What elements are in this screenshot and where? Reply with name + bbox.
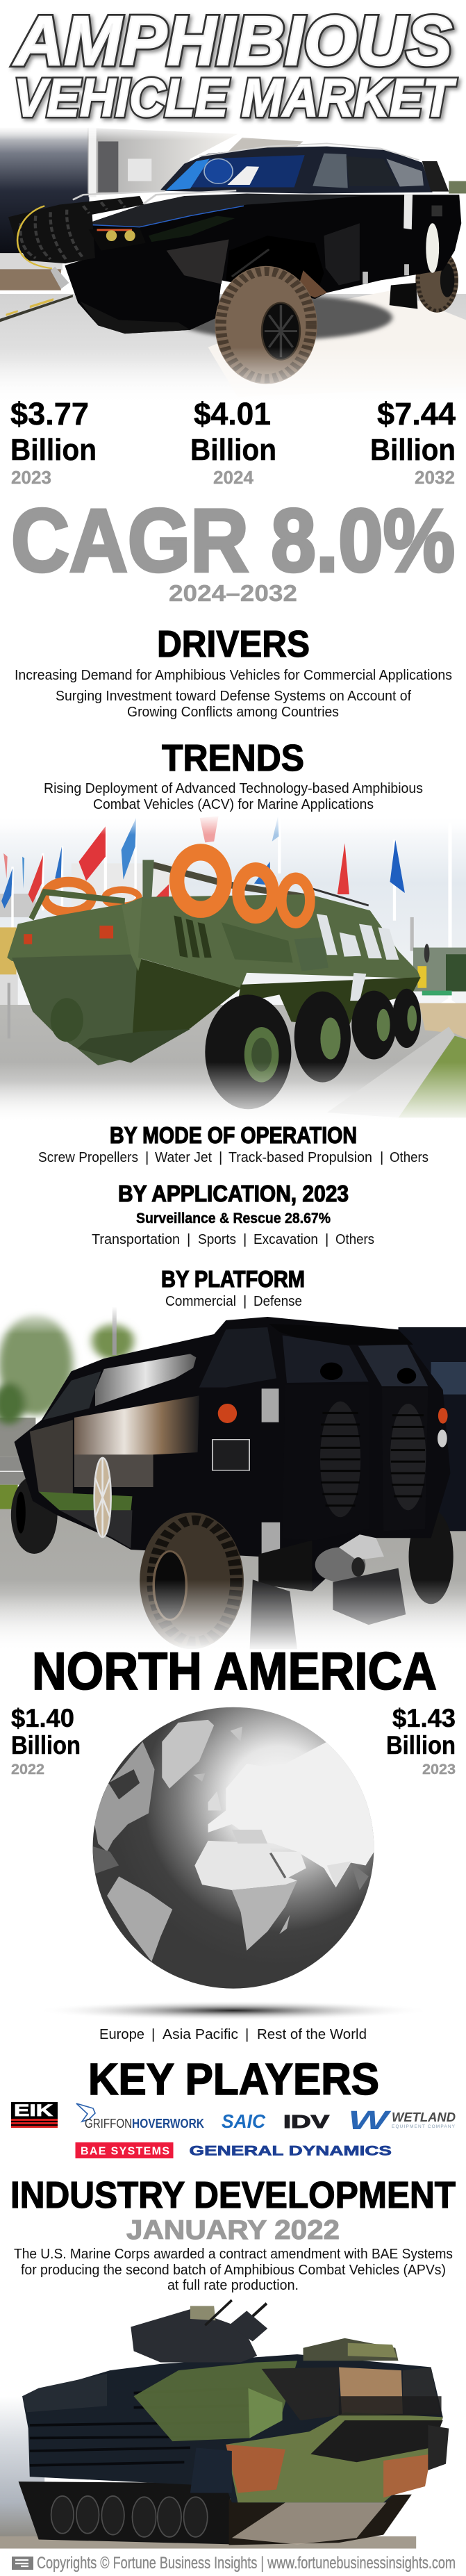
segments: platform: Commercial [165,1293,236,1309]
stat: 2032 market size: $7.44 [377,396,456,432]
logo: General Dynamics: GENERAL DYNAMICS [189,2143,392,2158]
segments: mode of operation: Screw Propellers [38,1149,138,1165]
title: AMPHIBIOUS [13,2,452,80]
segments: mode of operation: Others [390,1149,428,1165]
segments: application: | [325,1231,328,1247]
water jet nozzle [315,1534,384,1582]
body [15,1317,450,1591]
globe shadow [35,2001,431,2020]
segments: application: Transportation [92,1231,180,1247]
stat: north america 2022: 2022 [11,1762,44,1778]
segments: mode of operation: Water Jet [155,1149,212,1165]
spare tyre [8,190,236,268]
logo: Wetland Equipment Company: EQUIPMENT COMPANY [392,2124,456,2129]
segments: other regions [99,2026,367,2042]
stat: north america 2022 [11,1704,81,1778]
photo: green eight-wheeled armoured vehicle [0,814,466,1124]
tail lights and hinges [213,1388,448,1554]
segments: application: | [243,1231,247,1247]
logo: IDV: IDV [283,2111,330,2132]
front wheel [215,266,317,384]
segments: application [92,1231,374,1247]
stat: north america 2023: Billion [386,1731,456,1759]
heading: trends: TRENDS [162,737,304,779]
segments: other regions: | [151,2026,155,2042]
photo: black vehicle rear view [0,1306,466,1652]
logo: EIK [11,2101,58,2128]
logo: SAIC: SAIC [222,2110,266,2132]
heading: by platform: BY PLATFORM [161,1266,305,1292]
segments: application: Others [335,1231,374,1247]
stat: 2032 market size [370,396,456,488]
text: trends [44,780,423,812]
logo: Wetland Equipment Company: W [348,2106,392,2135]
text: trends: Rising Deployment of Advanced Technology-based Amphibious [44,780,423,796]
segments: platform: Defense [253,1293,302,1309]
title [13,2,457,128]
heading: north america: NORTH AMERICA [32,1642,437,1701]
title: AMPHIBIOUS [13,2,452,80]
logo: Griffon Hoverwork: GRIFFON [85,2117,132,2131]
tracks [19,2481,412,2545]
text: industry development detail: at full rate production. [167,2277,299,2293]
segments: application: Sports [198,1231,236,1247]
text: leading application share: Surveillance & Rescue 28.67% [136,1211,331,1227]
segments: platform [165,1293,302,1309]
life rings [177,852,310,923]
footer logo icon [12,2557,33,2570]
heading: drivers: DRIVERS [157,623,310,665]
photo: camouflaged amphibious combat vehicle [0,2300,449,2549]
segments: mode of operation [38,1149,428,1165]
tail and hatch panels [269,1324,428,1541]
segments: mode of operation: | [219,1149,222,1165]
rear wheel [140,1513,244,1649]
subheading: january 2022: JANUARY 2022 [126,2215,340,2245]
segments: other regions: Asia Pacific [163,2026,238,2042]
camouflage [134,2361,443,2502]
segments: other regions: Europe [99,2026,144,2042]
text: drivers list: Increasing Demand for Amphibious Vehicles for Commercial Applications [15,667,452,683]
stat: 2023 market size: $3.77 [10,396,89,432]
text: drivers list: Growing Conflicts among Countries [127,704,339,720]
text: drivers list [15,667,452,720]
stat: 2023 market size: Billion [10,433,97,467]
stat: 2024 market size: Billion [190,433,276,467]
stat: 2023 market size: 2023 [11,468,51,488]
segments: mode of operation: Track-based Propulsion [228,1149,372,1165]
heading: by application: BY APPLICATION, 2023 [118,1181,349,1206]
rear rail and small life rings [31,882,139,919]
heading: key players: KEY PLAYERS [88,2054,379,2104]
stat: north america 2022: $1.40 [11,1704,74,1732]
logo: Wetland Equipment Company [348,2106,456,2135]
photo: black amphibious vehicle [0,125,466,405]
logo: BAE Systems [75,2142,174,2158]
logo: Griffon Hoverwork [76,2103,204,2131]
logo: Wetland Equipment Company: WETLAND [392,2110,456,2124]
stat: 2023 market size [10,396,97,488]
CAGR figure: 2024–2032 [169,580,297,606]
stat: 2024 market size: $4.01 [194,396,271,432]
segments: platform: | [243,1293,247,1309]
stat: north america 2023: $1.43 [392,1704,456,1732]
stat: 2032 market size: 2032 [415,468,455,488]
text: industry development detail [14,2246,453,2293]
heading: by mode of operation: BY MODE OF OPERATION [110,1122,357,1148]
stat: 2024 market size [190,396,276,488]
logo: Griffon Hoverwork: HOVERWORK [132,2117,204,2131]
hull [22,2354,443,2504]
segments: application: | [187,1231,190,1247]
stat: north america 2022: Billion [11,1731,81,1759]
segments: application: Excavation [253,1231,318,1247]
hull panels [7,860,421,1065]
text: trends: Combat Vehicles (ACV) for Marine Applications [93,796,374,812]
rear wheel [415,248,458,313]
headlights [89,228,146,251]
logo: EIK: EIK [14,2101,53,2120]
text: drivers list: Surging Investment toward Defense Systems on Account of [56,688,411,704]
hull [65,194,461,334]
wheels [205,989,421,1109]
turret [22,2300,399,2412]
segments: mode of operation: | [380,1149,383,1165]
cabin and windows [160,143,449,193]
icon: grey globe [74,1707,392,2018]
segments: other regions: | [245,2026,249,2042]
stat: north america 2023 [386,1704,456,1778]
stat: 2024 market size: 2024 [213,468,254,488]
segments: mode of operation: | [145,1149,149,1165]
logo: BAE Systems: BAE SYSTEMS [81,2146,169,2157]
stat: 2032 market size: Billion [370,433,456,467]
segments: other regions: Rest of the World [257,2026,367,2042]
text: industry development detail: for producing the second batch of Amphibious Combat Vehicles (APVs) [21,2262,446,2278]
windows [317,914,399,1001]
stat: north america 2023: 2023 [422,1762,456,1778]
far wheels [11,1476,453,1604]
